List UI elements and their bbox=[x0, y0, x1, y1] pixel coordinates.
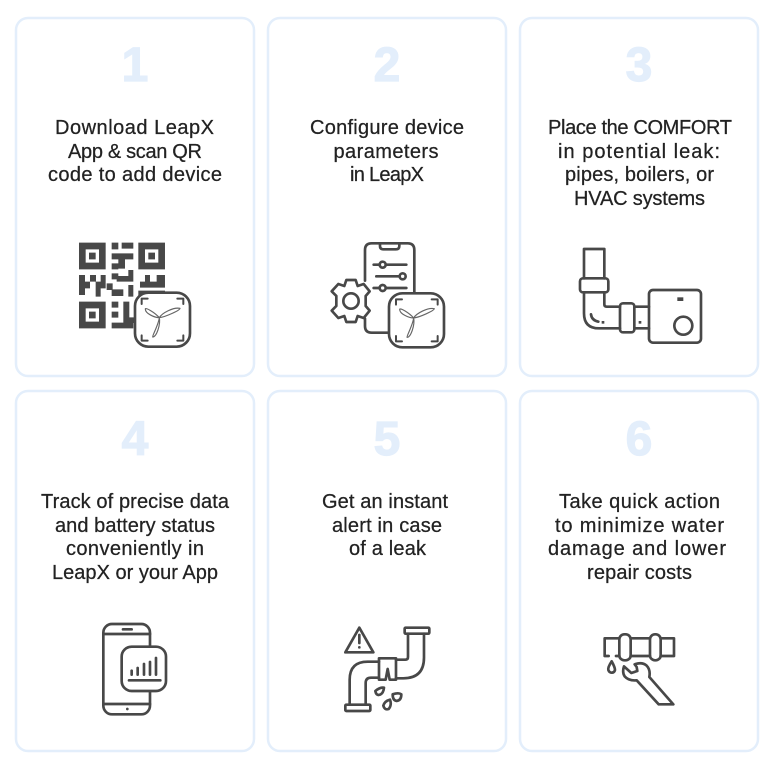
panel: step 3 bbox=[520, 18, 758, 376]
text: step 2 description: in LeapX bbox=[350, 164, 424, 186]
text: step 6 description: to minimize water bbox=[555, 515, 724, 537]
text: step 1 description: App & scan QR bbox=[68, 141, 202, 163]
icon: phone with chart bbox=[103, 624, 166, 714]
panel: step 6 bbox=[520, 391, 758, 751]
icon: QR code with device bbox=[79, 243, 190, 347]
text: step 5 description: alert in case bbox=[332, 515, 442, 537]
icon: leaking pipe with warning bbox=[345, 628, 429, 711]
text: step 4 description: Track of precise data bbox=[41, 491, 230, 513]
text: step 2 description: parameters bbox=[334, 141, 438, 163]
text: step 5 description: of a leak bbox=[349, 538, 427, 560]
text: step 3 description: HVAC systems bbox=[574, 188, 705, 210]
text: step 3 description: in potential leak: bbox=[558, 141, 720, 163]
step number 1: 1 bbox=[122, 39, 148, 92]
step number 3: 3 bbox=[626, 39, 652, 92]
panel: step 1 bbox=[16, 18, 254, 376]
panel: step 4 bbox=[16, 391, 254, 751]
text: step 3 description: Place the COMFORT bbox=[548, 117, 732, 139]
step number 6: 6 bbox=[626, 413, 652, 466]
text: step 3 description bbox=[548, 117, 732, 210]
text: step 5 description bbox=[322, 491, 448, 560]
text: step 3 description: pipes, boilers, or bbox=[565, 164, 714, 186]
text: step 4 description bbox=[41, 491, 230, 584]
step number 4: 4 bbox=[122, 413, 149, 466]
text: step 1 description: Download LeapX bbox=[55, 117, 214, 139]
step number 2: 2 bbox=[374, 39, 400, 92]
icon: pipe with wrench bbox=[605, 634, 674, 704]
step number 5: 5 bbox=[374, 413, 400, 466]
text: step 4 description: LeapX or your App bbox=[52, 562, 218, 584]
text: step 6 description: damage and lower bbox=[548, 538, 726, 560]
text: step 5 description: Get an instant bbox=[322, 491, 448, 513]
text: step 2 description bbox=[310, 117, 464, 186]
panel: step 2 bbox=[268, 18, 506, 376]
text: step 4 description: conveniently in bbox=[66, 538, 204, 560]
icon: phone settings, gear and device bbox=[332, 243, 444, 347]
text: step 1 description bbox=[48, 117, 222, 186]
icon: pipe elbow with sensor bbox=[580, 249, 701, 343]
text: step 4 description: and battery status bbox=[55, 515, 215, 537]
panel: step 5 bbox=[268, 391, 506, 751]
text: step 6 description: Take quick action bbox=[559, 491, 720, 513]
text: step 6 description bbox=[548, 491, 726, 584]
text: step 6 description: repair costs bbox=[587, 562, 692, 584]
text: step 1 description: code to add device bbox=[48, 164, 222, 186]
text: step 2 description: Configure device bbox=[310, 117, 464, 139]
